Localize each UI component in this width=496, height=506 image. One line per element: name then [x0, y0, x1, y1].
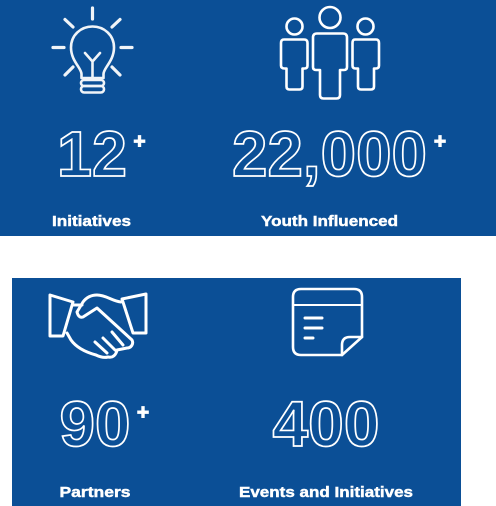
plus sign: 12: +: [133, 130, 146, 153]
label: Initiatives: Initiatives: [52, 213, 131, 230]
number: 90: 90: [60, 388, 130, 460]
icon: three people: [281, 7, 379, 98]
label: Events and Initiatives: Events and Initiatives: [239, 484, 413, 501]
plus sign: 90: +: [137, 401, 149, 424]
plus sign: 22,000: +: [434, 130, 446, 153]
number: 22,000: 22,000: [232, 118, 427, 190]
icon: handshake: [50, 294, 146, 357]
label: Partners: Partners: [60, 484, 130, 501]
icon: light bulb: [53, 8, 132, 92]
panel: bottom stats: [12, 278, 461, 506]
label: Youth Influenced: Youth Influenced: [261, 213, 398, 230]
icon: sticky note: [293, 289, 362, 355]
number: 12: 12: [57, 118, 127, 190]
panel: top stats: [0, 0, 496, 236]
number: 400: 400: [272, 388, 380, 460]
